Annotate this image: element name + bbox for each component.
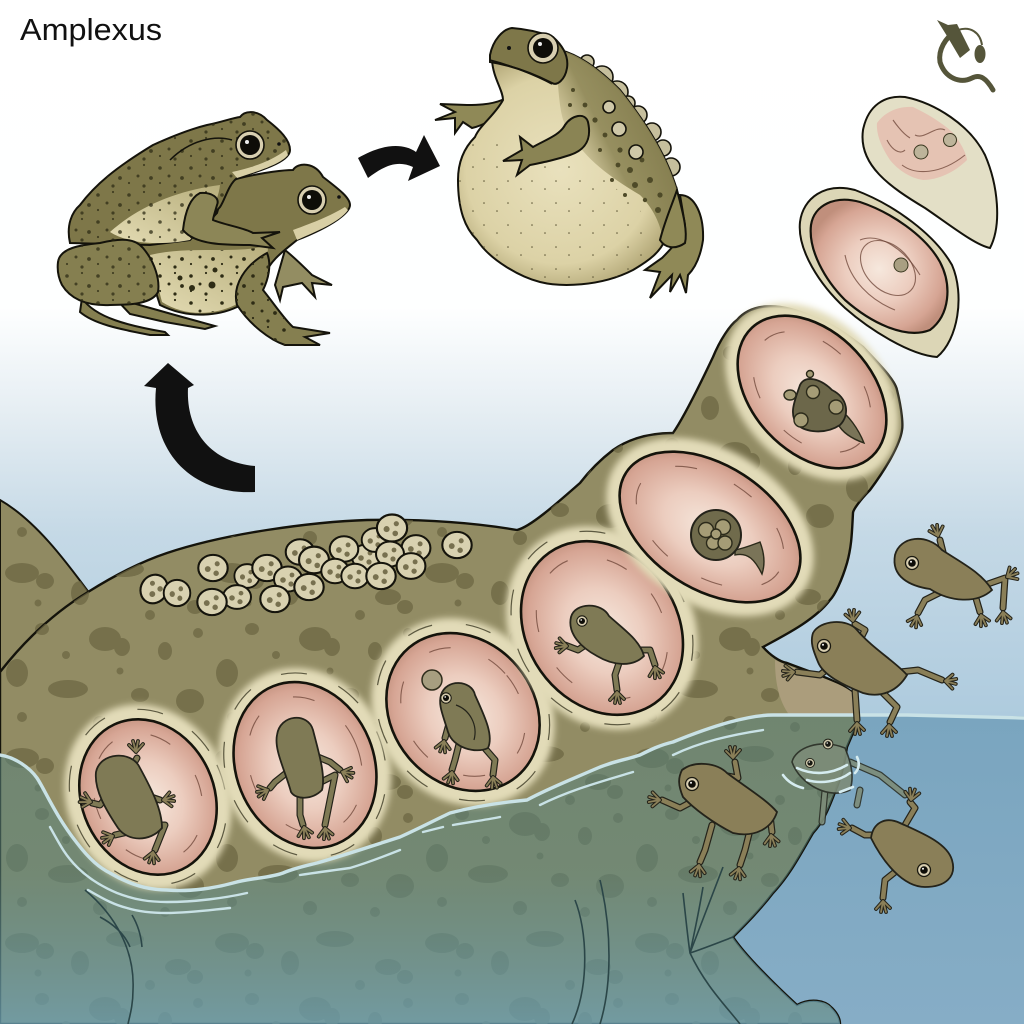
title: Amplexus	[20, 12, 162, 47]
pouch 1: froglet	[34, 677, 262, 917]
right arm	[503, 116, 589, 175]
clasping arm of upper toad	[183, 193, 280, 248]
rear leg and foot	[645, 195, 703, 298]
upper toad body	[69, 112, 290, 245]
hind thigh of upper toad	[58, 240, 158, 305]
hind foot toes	[80, 298, 215, 335]
front leg of lower toad	[236, 253, 330, 345]
froglet swimming at top right	[894, 524, 1020, 629]
lower toad body	[140, 165, 350, 315]
rear hump of adult toad	[0, 500, 90, 680]
froglet at water edge on body	[648, 747, 779, 880]
pouch 3: froglet with egg	[333, 581, 593, 843]
back skin	[558, 50, 687, 240]
unhatched egg	[422, 670, 442, 690]
water surface	[600, 716, 1024, 1024]
underwater tint on body	[0, 716, 854, 1024]
back spots	[568, 88, 663, 213]
froglet in pouch 2	[255, 718, 355, 840]
eggs on the toad's back	[135, 514, 472, 615]
curved arrow: amplexus to gravid female	[358, 135, 440, 181]
adult toad body with brood pouches	[0, 306, 902, 1024]
rear thigh	[660, 190, 686, 247]
left arm	[435, 100, 503, 133]
icon: small tadpole and capsule	[937, 20, 993, 90]
back glands	[603, 101, 643, 159]
pouch 5: egg cluster with tail	[573, 401, 847, 653]
outer pouch lid with two bumps	[862, 97, 997, 248]
neck lobe	[775, 660, 858, 716]
detached pouch lid with bump	[800, 188, 959, 357]
froglet swimming lower right	[838, 788, 953, 912]
swollen body	[458, 50, 677, 285]
curved arrow: back to amplexus	[144, 363, 255, 492]
amplexus pair of toads	[58, 112, 350, 345]
pouch 2: froglet	[190, 642, 420, 888]
froglet in pouch 1	[79, 741, 175, 864]
head	[490, 28, 567, 84]
belly specks	[458, 140, 649, 285]
froglet in pouch 4	[555, 606, 664, 703]
pouch 4: froglet	[467, 489, 737, 767]
pouch 6: developing embryo	[690, 269, 934, 515]
far arm of lower toad	[275, 250, 332, 300]
froglet in pouch 3	[435, 683, 501, 789]
submerged froglet with ripples	[783, 739, 905, 822]
back bumps	[580, 55, 680, 176]
froglet climbing off body	[782, 609, 957, 736]
water line ripples	[0, 715, 1024, 913]
gravid toad with swollen belly	[435, 28, 703, 298]
